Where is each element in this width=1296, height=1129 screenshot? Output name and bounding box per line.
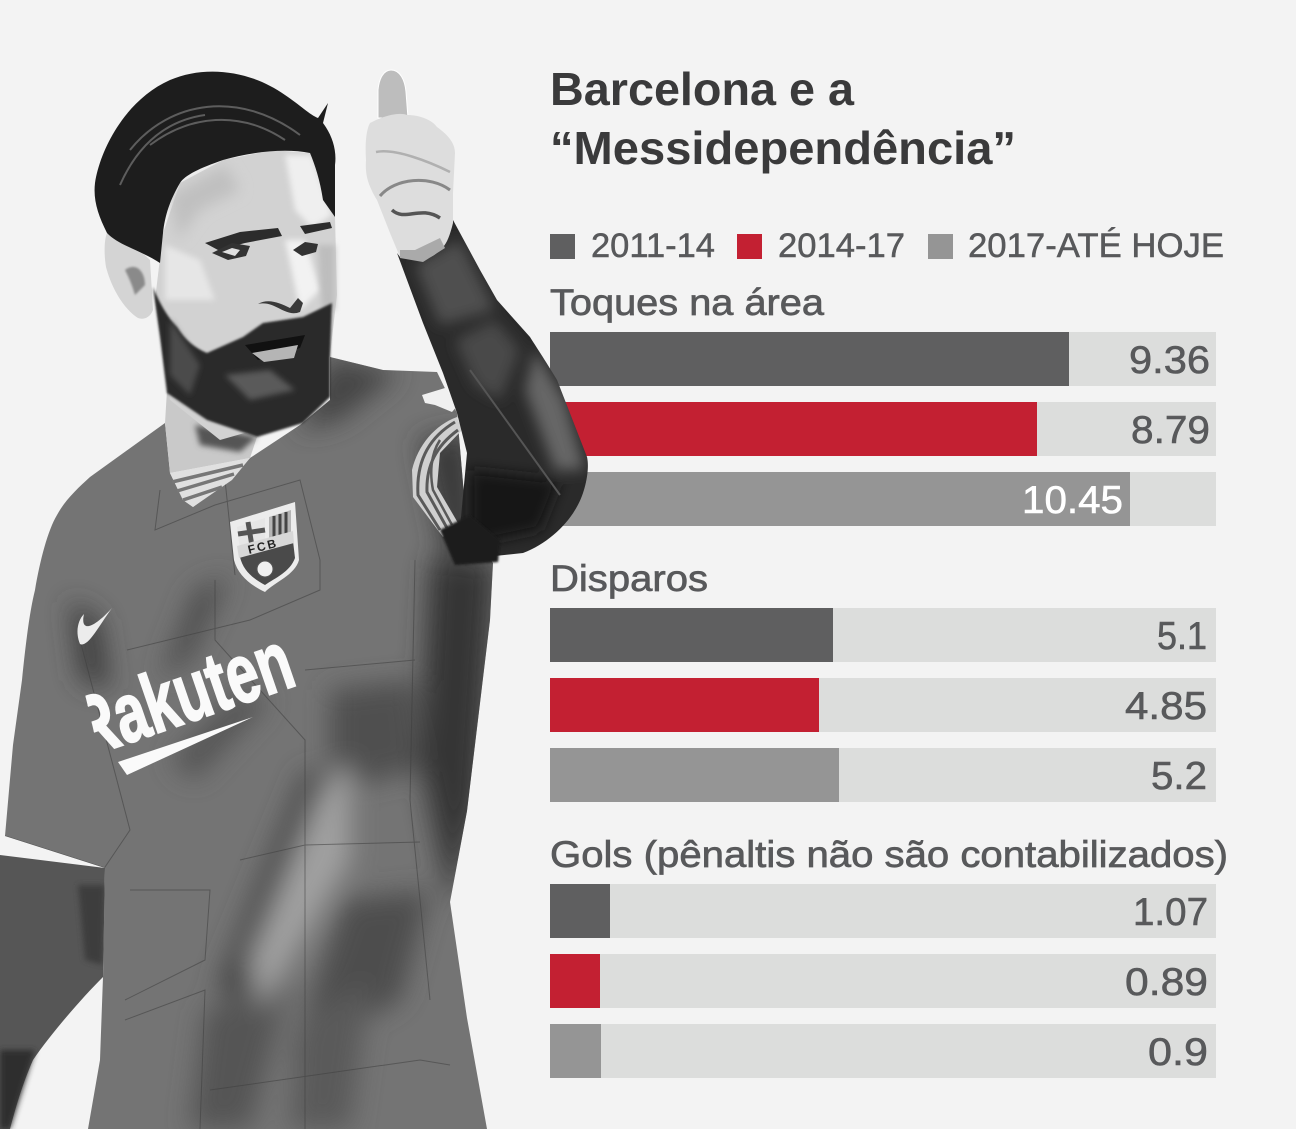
panel: gols [550, 834, 1228, 1078]
club crest [230, 502, 299, 592]
legend: 2011-14 [591, 227, 715, 265]
bar: gols 2014-17: 0.89 [1125, 961, 1208, 1004]
bar: toques 2011-14: 9.36 [1129, 339, 1210, 382]
bar: toques 2014-17: 8.79 [1131, 409, 1210, 452]
bar: toques 2014-17 [550, 402, 1216, 456]
legend: 2014-17 [778, 227, 905, 265]
club crest: FCB [246, 536, 279, 557]
nose shadow [258, 298, 303, 313]
panel: toques na área [550, 282, 1216, 526]
ear [105, 233, 153, 319]
panel: disparos [550, 558, 1216, 802]
bar: toques 2017-hoje: 10.45 [1022, 479, 1123, 522]
bar: disparos 2014-17 [550, 678, 1216, 732]
bar: gols 2017-hoje [550, 1024, 1216, 1078]
legend [550, 227, 1224, 265]
sponsor mark on shoulder [422, 388, 458, 412]
bar: toques 2017-hoje [550, 472, 1216, 526]
nike swoosh [77, 608, 112, 644]
heading: gols: Gols (pênaltis não são contabilizados) [550, 834, 1228, 875]
bar: disparos 2017-hoje [550, 748, 1216, 802]
hand and thumb [366, 70, 455, 262]
title [550, 63, 1016, 174]
jersey torso [5, 357, 495, 1129]
bar: disparos 2017-hoje: 5.2 [1151, 755, 1207, 798]
beard [153, 287, 332, 437]
bar: toques 2011-14 [550, 332, 1216, 386]
sponsor logo [85, 644, 296, 775]
heading: toques na área: Toques na área [550, 282, 824, 323]
bar: disparos 2014-17: 4.85 [1125, 685, 1207, 728]
collar [170, 458, 250, 507]
face [155, 150, 337, 440]
bar: disparos 2011-14: 5.1 [1157, 615, 1207, 658]
bar: gols 2011-14: 1.07 [1133, 891, 1208, 934]
title: “Messidependência” [550, 122, 1016, 174]
shoulder cuff stripes [412, 417, 462, 537]
bar: gols 2011-14 [550, 884, 1216, 938]
legend: 2017-ATÉ HOJE [968, 227, 1224, 265]
photo: player giving thumbs up [0, 70, 588, 1129]
neck [165, 390, 257, 473]
eyes and brows [205, 222, 332, 260]
bar: gols 2014-17 [550, 954, 1216, 1008]
bar: disparos 2011-14 [550, 608, 1216, 662]
hair [95, 72, 335, 263]
heading: disparos: Disparos [550, 558, 708, 599]
left forearm [0, 855, 105, 1129]
bar: gols 2017-hoje: 0.9 [1148, 1031, 1208, 1074]
sponsor logo: Rakuten [60, 613, 305, 775]
armpit shadow [440, 515, 500, 565]
sleeve [397, 220, 588, 560]
title: Barcelona e a [550, 63, 854, 115]
